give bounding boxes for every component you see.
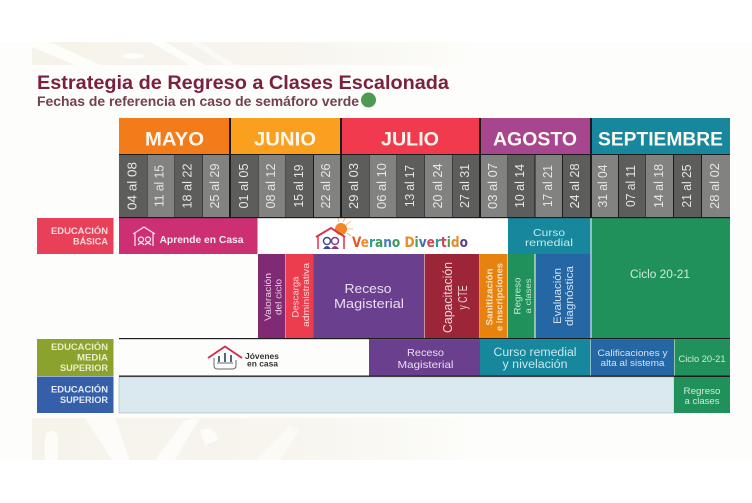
block: Jóvenes en casa — [119, 339, 368, 376]
block: Evaluación diagnóstica: Evaluación — [552, 268, 564, 324]
row label: Educación Básica: BÁSICA — [73, 236, 108, 248]
block: Regreso a clases (superior) — [674, 377, 730, 413]
block: Aprende en Casa: Aprende en Casa — [160, 235, 244, 246]
date cells: 01 al 05 — [237, 163, 251, 209]
block: Regreso a clases (basica): Regreso — [512, 278, 524, 314]
date cells: 08 al 12 — [264, 163, 278, 209]
icon: house with sun — [316, 218, 353, 249]
block: Calificaciones y alta al sistema — [591, 339, 674, 376]
block: Jóvenes en casa: Jóvenes — [245, 352, 280, 361]
block: Sanitización e inscripciones: Sanitización — [484, 268, 494, 326]
date cells: 17 al 21 — [541, 165, 555, 207]
block: Descarga administrativa — [286, 254, 314, 338]
date cells: 15 al 19 — [292, 164, 306, 208]
month header: JULIO: JULIO — [381, 130, 439, 150]
icon: green traffic light — [361, 92, 376, 108]
block: Valoración del ciclo — [258, 254, 286, 338]
icon: house — [133, 227, 155, 246]
block: Ciclo 20-21 (media superior) — [674, 339, 730, 376]
block: Receso Magisterial (media superior): Receso — [407, 347, 444, 359]
title: Estrategia de Regreso a Clases Escalonada — [37, 73, 449, 94]
date cells: 22 al 26 — [319, 163, 333, 209]
date cells: 14 al 18 — [652, 164, 666, 208]
block: Verano Divertido — [258, 218, 508, 254]
date cells: 27 al 31 — [458, 164, 472, 208]
row label: Educación Básica — [37, 218, 114, 254]
date cells: 25 al 29 — [208, 163, 222, 209]
subtitle: Fechas de referencia en caso de semáforo verde — [37, 93, 359, 109]
block: Ciclo 20-21: Ciclo 20-21 — [630, 269, 690, 281]
row label: Educación Superior — [37, 376, 114, 413]
block: Descarga administrativa: administrativa — [301, 262, 312, 327]
block: pale bar educación superior — [119, 377, 674, 413]
date cells: 07 al 11 — [624, 165, 638, 207]
block: Calificaciones y alta al sistema: alta al sistema — [600, 358, 665, 369]
block: Receso Magisterial (basica): Receso — [344, 281, 392, 296]
block: Receso Magisterial (basica) — [314, 254, 424, 338]
month header: MAYO: MAYO — [145, 130, 204, 150]
block: Regreso a clases (superior): Regreso — [684, 386, 720, 397]
date cells: 24 al 28 — [568, 163, 582, 209]
block: Receso Magisterial (basica): Magisterial — [334, 296, 404, 311]
row label: Educación Superior: EDUCACIÓN — [51, 384, 108, 396]
block: Aprende en Casa — [119, 218, 258, 254]
block: Sanitización e inscripciones: e inscripciones — [494, 263, 504, 331]
row label: Educación Superior: SUPERIOR — [60, 395, 108, 406]
month header: JULIO — [342, 118, 479, 154]
date cells: 13 al 17 — [403, 165, 417, 207]
month header: AGOSTO: AGOSTO — [493, 130, 577, 150]
date cells: 20 al 24 — [431, 163, 445, 209]
row label: Educación Media Superior: EDUCACIÓN — [51, 341, 108, 353]
date cells: 11 al 15 — [152, 165, 166, 207]
block: Curso remedial y nivelación — [480, 339, 590, 376]
block: Receso Magisterial (media superior) — [369, 339, 480, 376]
month and date grid backing — [119, 118, 730, 218]
date cells: 18 al 22 — [181, 163, 195, 209]
month header: SEPTIEMBRE — [592, 118, 730, 154]
decorative band: top — [32, 42, 466, 65]
block: Curso remedial: remedial — [525, 237, 573, 249]
block: Capacitación y CTE — [424, 254, 480, 338]
block: Valoración del ciclo: Valoración — [263, 273, 274, 321]
row label: Educación Básica: EDUCACIÓN — [51, 225, 108, 237]
block: Regreso a clases (superior): a clases — [684, 396, 720, 407]
block: Curso remedial y nivelación: Curso remedial — [494, 347, 576, 359]
block: Regreso a clases (basica): a clases — [523, 278, 533, 314]
row label: Educación Media Superior: SUPERIOR — [60, 363, 108, 374]
date cells: 21 al 25 — [680, 164, 694, 208]
block: Regreso a clases (basica) — [508, 254, 534, 338]
block: Sanitización e inscripciones — [480, 254, 508, 338]
block: Capacitación y CTE: y CTE — [456, 286, 470, 310]
date cells: 31 al 04 — [596, 164, 610, 208]
block: Curso remedial y nivelación: y nivelación — [502, 359, 568, 371]
row separators — [119, 217, 730, 377]
icon: house with youths — [208, 346, 242, 369]
block: Jóvenes en casa: en casa — [247, 360, 279, 368]
block: Descarga administrativa: Descarga — [290, 276, 302, 318]
date cells: 06 al 10 — [375, 163, 389, 209]
month header: JUNIO: JUNIO — [254, 130, 316, 150]
month header: JUNIO — [231, 118, 340, 154]
month header: AGOSTO — [481, 118, 590, 154]
month header: SEPTIEMBRE: SEPTIEMBRE — [598, 130, 723, 150]
date cells: 28 al 02 — [708, 163, 722, 209]
block: Curso remedial: Curso — [533, 227, 565, 239]
block: Evaluación diagnóstica — [536, 254, 590, 338]
date cells: 29 al 03 — [347, 163, 361, 209]
date cells: 10 al 14 — [513, 164, 527, 208]
block: Evaluación diagnóstica: diagnóstica — [564, 265, 576, 326]
block: Receso Magisterial (media superior): Magisterial — [398, 359, 454, 371]
row label: Educación Media Superior — [37, 339, 114, 376]
block: Calificaciones y alta al sistema: Calificaciones y — [598, 348, 668, 359]
block: Ciclo 20-21 (media superior): Ciclo 20-21 — [678, 354, 726, 365]
decorative band: bottom — [32, 418, 466, 460]
block: Capacitación y CTE: Capacitación — [441, 262, 455, 333]
block: Ciclo 20-21 — [592, 218, 730, 338]
date cells: 03 al 07 — [486, 163, 500, 209]
block: Curso remedial — [508, 218, 590, 254]
block: Verano Divertido: Verano Divertido — [352, 235, 468, 251]
month header: MAYO — [119, 118, 229, 154]
row label: Educación Media Superior: MEDIA — [77, 352, 108, 364]
date cells — [119, 155, 730, 217]
block: Valoración del ciclo: del ciclo — [274, 279, 284, 315]
date cells: 04 al 08 — [126, 162, 140, 210]
